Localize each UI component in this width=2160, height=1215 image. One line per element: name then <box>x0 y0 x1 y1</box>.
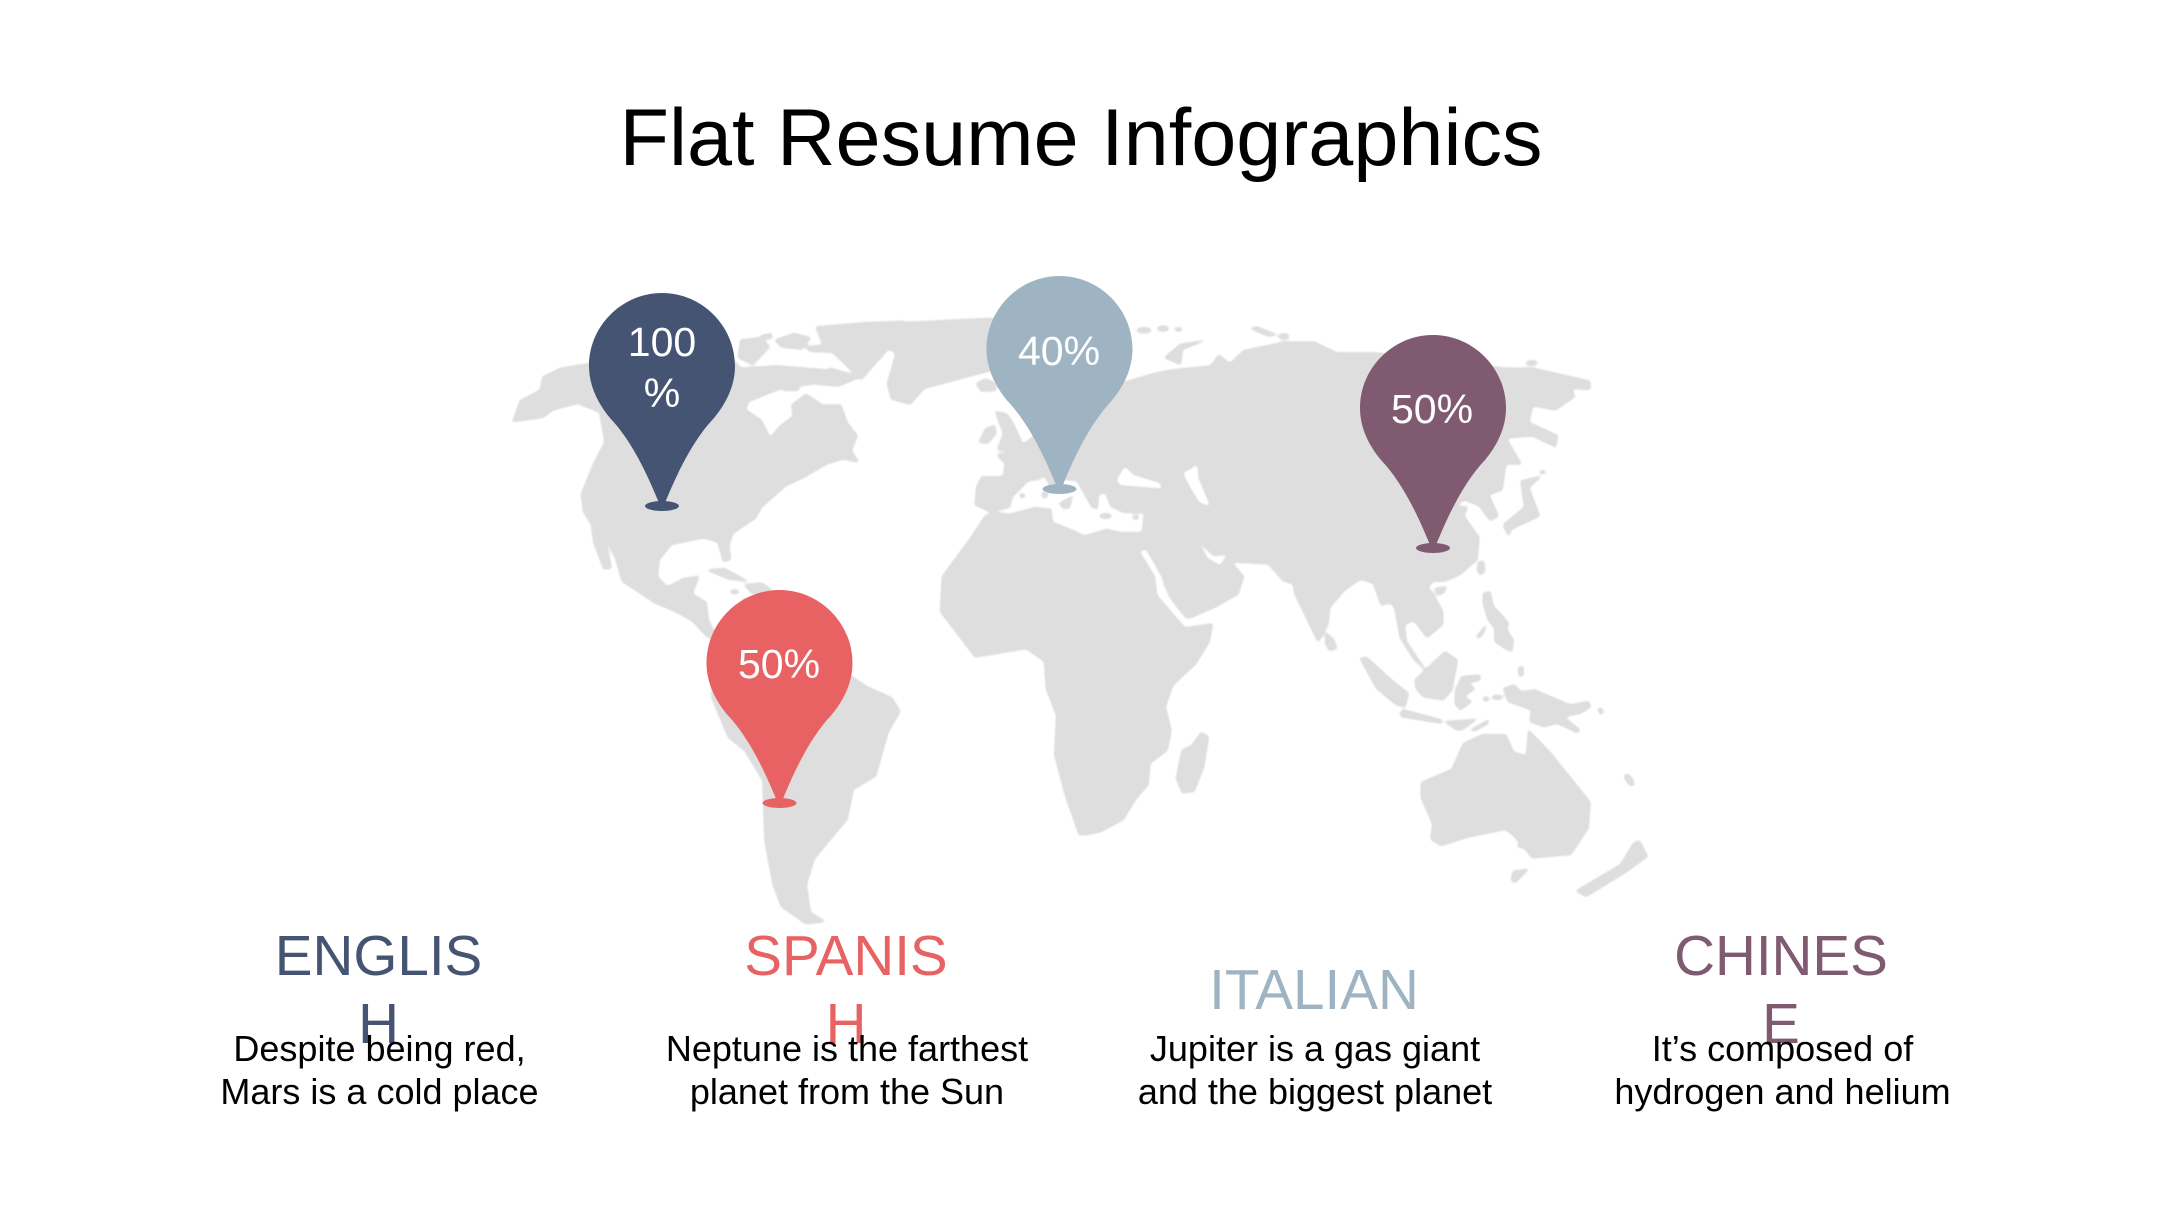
description: Chinese: It’s composed of <box>1652 1028 1913 1069</box>
pin: English 100% <box>589 293 735 511</box>
pin: Chinese 50%: 50% <box>1391 386 1473 432</box>
pin: English 100%: % <box>644 370 680 416</box>
panel: English <box>220 924 539 1112</box>
description: English: Despite being red, <box>233 1028 526 1069</box>
pin: Spanish 50% <box>706 590 852 808</box>
heading: Spanish: SPANIS <box>744 924 948 987</box>
description: Italian: and the biggest planet <box>1138 1071 1492 1112</box>
pin: Chinese 50% <box>1360 335 1506 553</box>
pin: Spanish 50%: 50% <box>738 641 820 687</box>
description: English: Mars is a cold place <box>220 1071 539 1112</box>
heading: Chinese: CHINES <box>1674 924 1888 987</box>
heading: Spanish: H <box>826 992 866 1055</box>
pin: English 100%: 100 <box>628 319 696 365</box>
panel: Spanish <box>666 924 1028 1112</box>
panel: Italian <box>1138 958 1492 1112</box>
pin: Italian 40% <box>986 276 1132 494</box>
heading: Chinese: E <box>1762 992 1800 1055</box>
description: Italian: Jupiter is a gas giant <box>1150 1028 1480 1069</box>
heading: English: H <box>358 992 399 1055</box>
description: Spanish: Neptune is the farthest <box>666 1028 1028 1069</box>
heading: Italian: ITALIAN <box>1209 958 1419 1021</box>
description: Spanish: planet from the Sun <box>690 1071 1004 1112</box>
pin: Italian 40%: 40% <box>1018 328 1100 374</box>
title: Flat Resume Infographics <box>620 93 1542 183</box>
heading: English: ENGLIS <box>275 924 482 987</box>
description: Chinese: hydrogen and helium <box>1614 1071 1951 1112</box>
world map <box>480 280 1700 960</box>
panel: Chinese <box>1614 924 1951 1112</box>
